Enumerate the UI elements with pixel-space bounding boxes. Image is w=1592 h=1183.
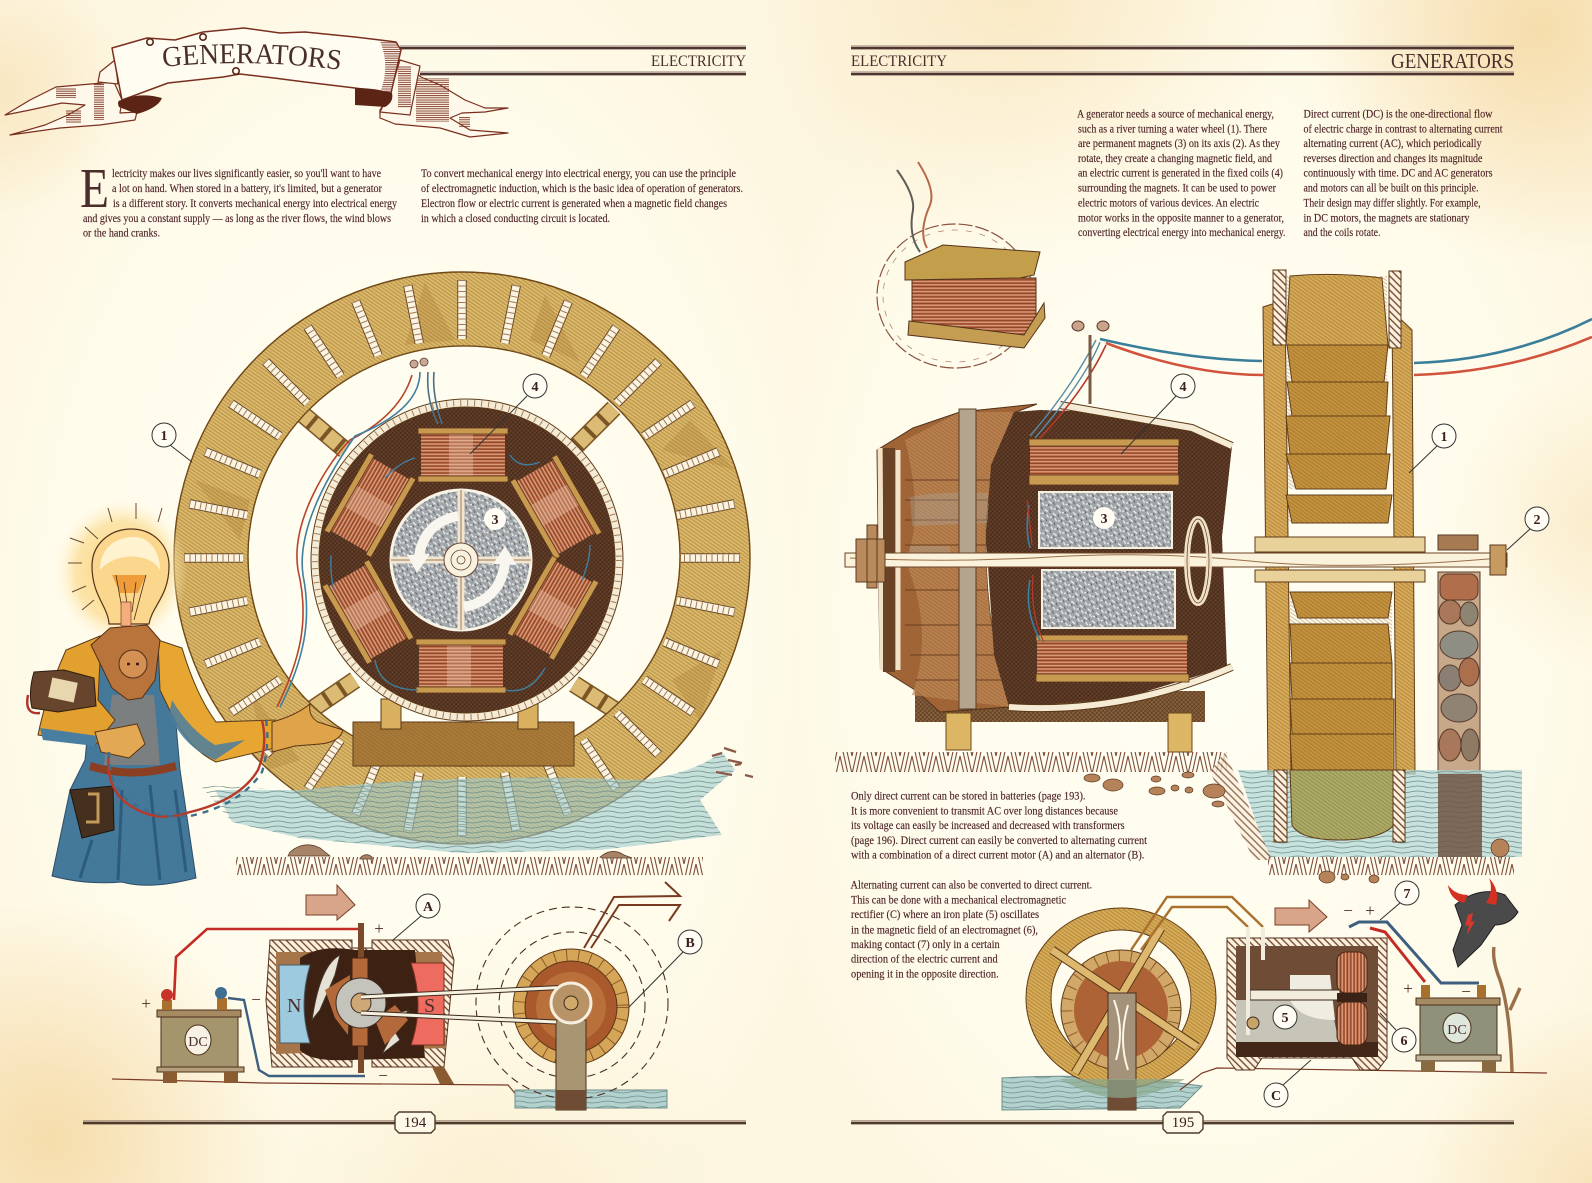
callout C: C xyxy=(1271,1089,1281,1104)
north magnet xyxy=(279,965,310,1043)
motor A casing xyxy=(266,923,454,1084)
banner rear folds xyxy=(98,60,420,115)
coil top plate xyxy=(905,245,1040,280)
wheel ring xyxy=(174,272,750,844)
intro text left page second column: Electron flow or electric current is generated when a magnetic field changes xyxy=(421,196,727,210)
contact arm xyxy=(1250,990,1340,1000)
text block: direct current: Direct current (DC) is the one-directional flow xyxy=(1304,106,1493,120)
intro text left column with drop cap: lectricity makes our lives significantly easier, so you'll want to have xyxy=(112,166,381,180)
wires up to terminals xyxy=(277,358,442,707)
callout 2: 2 xyxy=(1534,513,1540,528)
wheel rim uprights xyxy=(1273,270,1401,348)
battery xyxy=(1416,985,1501,1072)
generator feet xyxy=(946,713,1192,752)
small water wheel xyxy=(1026,908,1216,1110)
callout 7 xyxy=(1380,881,1419,920)
text block: how a generator works xyxy=(1077,106,1286,239)
callout 7: 7 xyxy=(1404,887,1410,902)
ground hatching xyxy=(835,752,1227,772)
helmet collar xyxy=(91,625,160,700)
callout B: B xyxy=(685,936,695,951)
text block: how a generator works: an electric current is generated in the fixed coils (4) xyxy=(1078,166,1283,180)
polarity signs xyxy=(1343,901,1471,1001)
river stones xyxy=(288,845,632,859)
callout 4: 4 xyxy=(1180,380,1186,395)
text block: direct current: and motors can all be built on this principle. xyxy=(1304,180,1478,194)
water splash xyxy=(712,748,753,777)
polarity signs: − xyxy=(1343,901,1353,920)
text block: how a generator works: rotate, they create a changing magnetic field, and xyxy=(1078,151,1272,165)
wheel struts xyxy=(300,408,618,712)
lightbulb-headed character xyxy=(27,500,343,885)
text block: direct current storage: (page 196). Direct current can easily be converted to alternating current xyxy=(851,833,1148,847)
callout 5: 5 xyxy=(1282,1011,1288,1026)
stator coil wires xyxy=(331,455,590,691)
callout 6 xyxy=(1380,1013,1416,1052)
alternator post xyxy=(556,1020,586,1110)
text block: direct current storage: Only direct current can be stored in batteries (page 193). xyxy=(851,788,1086,802)
electromagnet coils xyxy=(1337,952,1367,993)
robe folds xyxy=(80,785,186,880)
text block: how a generator works: are permanent magnets (3) on its axis (2). As they xyxy=(1078,136,1280,150)
banner edge shading xyxy=(380,41,401,93)
intro text left column with drop cap: is a different story. It converts mechanical energy into electrical energy xyxy=(113,196,397,210)
text block: alternating to direct current: opening it in the opposite direction. xyxy=(851,966,999,980)
robe xyxy=(52,655,196,885)
stator coils xyxy=(322,428,602,693)
banner scroll curls xyxy=(147,34,239,74)
detail inset: single coil xyxy=(877,162,1045,368)
grey chest xyxy=(104,695,160,765)
river trench xyxy=(1238,770,1522,857)
holding hand xyxy=(95,724,145,758)
text block: how a generator works: electric motors of various devices. An electric xyxy=(1078,196,1259,210)
rotation arrow xyxy=(464,563,505,607)
intro text left page second column: of electromagnetic induction, which is the basic idea of operation of generators. xyxy=(421,181,743,195)
intro text left page second column xyxy=(421,166,743,225)
outstretched hand xyxy=(272,704,343,752)
text block: direct current storage: with a combination of a direct current motor (A) and an alternator (B). xyxy=(851,848,1144,862)
water under small wheel xyxy=(1002,1076,1202,1110)
text block: direct current storage: its voltage can easily be increased and decreased with transformers xyxy=(851,818,1125,832)
polarity signs: + xyxy=(1365,901,1375,920)
polarity signs: − xyxy=(1461,982,1471,1001)
jacket shoulder and left arm xyxy=(38,636,115,745)
callout A xyxy=(393,894,440,940)
water wheel side: posts xyxy=(1263,300,1415,774)
generator base xyxy=(915,691,1205,722)
text block: direct current storage xyxy=(851,788,1148,862)
stone pillar xyxy=(1438,535,1480,774)
bulb rays xyxy=(68,503,162,610)
ground line xyxy=(1180,1068,1547,1090)
wheel paddles xyxy=(184,280,740,836)
right page header: GENERATORS xyxy=(1391,49,1514,73)
output wires xyxy=(584,882,680,948)
magnets xyxy=(1039,492,1172,548)
wheel shadow wedges xyxy=(195,282,735,770)
battery terminals xyxy=(162,1000,172,1010)
end cap xyxy=(1490,545,1506,575)
illustration: generator side view xyxy=(835,270,1592,883)
title banner xyxy=(4,27,509,138)
wheel buckets xyxy=(1286,274,1394,770)
DC output wires xyxy=(1349,922,1479,983)
insulators xyxy=(1072,321,1109,404)
text block: alternating to direct current: This can be done with a mechanical electromagnetic xyxy=(851,892,1066,906)
text block: direct current: of electric charge in contrast to alternating current xyxy=(1304,121,1503,135)
text block: direct current: alternating current (AC), which periodically xyxy=(1304,136,1482,150)
callout 3 xyxy=(484,508,506,530)
banner title text: GENERATORS xyxy=(163,44,340,70)
text block: alternating to direct current: making contact (7) only in a certain xyxy=(851,937,1000,951)
text block: direct current: and the coils rotate. xyxy=(1304,225,1380,239)
text block: direct current: reverses direction and changes its magnitude xyxy=(1304,151,1482,165)
right page header: ELECTRICITY xyxy=(851,53,947,70)
ring xyxy=(1187,519,1209,603)
banner main band xyxy=(112,28,401,100)
horned hat xyxy=(1448,878,1518,967)
text block: alternating to direct current: direction of the electric current and xyxy=(851,952,998,966)
text block: direct current: continuously with time. DC and AC generators xyxy=(1304,166,1493,180)
motor A casing: S xyxy=(424,995,435,1017)
battery xyxy=(157,987,244,1083)
text block: how a generator works: such as a river turning a water wheel (1). There xyxy=(1078,121,1267,135)
drop cap: E xyxy=(80,158,109,220)
callout 1: 1 xyxy=(160,429,168,444)
page header: left rules and section label: ELECTRICITY xyxy=(651,53,746,70)
callout 4: 4 xyxy=(532,380,538,395)
banner curled ends xyxy=(118,88,392,114)
left frame xyxy=(880,448,898,670)
polarity signs: − xyxy=(378,1066,388,1085)
armature xyxy=(358,923,364,1073)
axle xyxy=(845,519,1507,603)
intro text left column with drop cap: a lot on hand. When stored in a battery, it's limited, but a generator xyxy=(112,181,382,195)
text block: how a generator works: A generator needs a source of mechanical energy, xyxy=(1077,106,1274,120)
text block: alternating to direct current: in the magnetic field of an electromagnet (6), xyxy=(851,922,1038,936)
intro text left page second column: in which a closed conducting circuit is located. xyxy=(421,211,610,225)
text block: how a generator works: motor works in the opposite manner to a generator, xyxy=(1078,210,1284,224)
callout B xyxy=(629,930,702,1007)
polarity signs: + xyxy=(374,919,384,938)
callout 3: 3 xyxy=(1100,512,1108,527)
callout 2 xyxy=(1507,507,1549,550)
wheel cables xyxy=(1030,319,1592,438)
rotor with permanent magnets xyxy=(391,490,531,630)
intro text left column with drop cap xyxy=(80,158,397,240)
drive belt xyxy=(361,987,571,1022)
magnetic field lines xyxy=(476,907,668,1099)
bulb glass xyxy=(92,529,169,624)
text block: how a generator works: converting electrical energy into mechanical energy. xyxy=(1078,225,1286,239)
twig stand xyxy=(1494,947,1520,1072)
direction arrow xyxy=(306,885,355,920)
page header: left rules and section label xyxy=(400,46,746,74)
submerged pillar xyxy=(1438,774,1482,857)
left page footer: 194 xyxy=(404,1115,427,1131)
illustration: water wheel front view xyxy=(152,272,753,875)
inset circle xyxy=(877,224,1033,368)
text block: direct current: in DC motors, the magnets are stationary xyxy=(1304,210,1470,224)
barrel staves xyxy=(877,404,1037,712)
intro text left page second column: To convert mechanical energy into electrical energy, you can use the principle xyxy=(421,166,736,180)
polarity signs: + xyxy=(1403,979,1413,998)
water under alternator xyxy=(515,1090,667,1108)
flange xyxy=(856,525,885,588)
text block: direct current: Their design may differ slightly. For example, xyxy=(1304,196,1480,210)
rectifier box xyxy=(1227,927,1387,1070)
callout A: A xyxy=(423,900,434,915)
stand legs xyxy=(381,699,538,729)
river under the wheel xyxy=(215,752,735,853)
coil wires xyxy=(1027,505,1040,640)
submerged bucket xyxy=(1290,770,1394,840)
wheel spokes xyxy=(1052,928,1197,1073)
rotation arrow xyxy=(419,516,458,556)
pebbles xyxy=(1084,772,1509,883)
stand base xyxy=(353,722,574,766)
twisted cable xyxy=(108,720,264,817)
negative wire xyxy=(228,998,365,1076)
submerged posts xyxy=(1274,770,1405,842)
belt xyxy=(89,762,177,776)
text block: how a generator works: surrounding the magnets. It can be used to power xyxy=(1078,180,1276,194)
ground line xyxy=(112,1079,523,1103)
direction arrow xyxy=(1275,900,1327,932)
bottom coil xyxy=(1036,635,1189,682)
rectifier diagram xyxy=(1002,878,1547,1110)
river bed hatching xyxy=(236,857,703,875)
callout 3: 3 xyxy=(492,513,498,528)
callout C xyxy=(1264,1060,1311,1107)
polarity signs xyxy=(141,919,388,1085)
callout 1 xyxy=(1409,424,1456,473)
callout 4 xyxy=(470,374,547,454)
text block: alternating to direct current xyxy=(850,878,1092,980)
callout 1: 1 xyxy=(1440,430,1448,445)
housing strap xyxy=(1009,405,1232,708)
AC output wires xyxy=(1131,897,1263,950)
intro text left column with drop cap: or the hand cranks. xyxy=(83,226,160,240)
jacket right arm xyxy=(158,640,275,762)
right page header xyxy=(851,46,1514,74)
callout 3 xyxy=(1093,507,1115,529)
hand-held meter xyxy=(30,670,96,712)
left page footer xyxy=(83,1112,746,1133)
stator housing xyxy=(315,403,619,717)
coil lead wires xyxy=(897,170,920,252)
text block: direct current xyxy=(1304,106,1503,239)
barrel hoop xyxy=(959,409,976,709)
wheel submerged tint xyxy=(1060,1079,1185,1098)
callout 6: 6 xyxy=(1400,1034,1408,1049)
battery terminals xyxy=(1421,985,1486,998)
intro text left column with drop cap: and gives you a constant supply — as long as the river flows, the wind blows xyxy=(83,211,391,225)
DC motor and alternator diagram xyxy=(112,882,702,1110)
callout 4 xyxy=(1121,374,1195,454)
callout 5 xyxy=(1273,1005,1297,1029)
bulb glow xyxy=(56,500,188,644)
banner tails xyxy=(5,62,508,137)
positive wire xyxy=(174,929,360,1000)
polarity signs: + xyxy=(141,994,151,1013)
interior xyxy=(986,410,1232,707)
right page footer xyxy=(851,1112,1514,1133)
right page footer: 195 xyxy=(1172,1115,1194,1131)
text block: alternating to direct current: Alternating current can also be converted to direct current. xyxy=(850,878,1092,892)
south magnet xyxy=(411,963,444,1045)
polarity signs: − xyxy=(251,990,261,1009)
text block: alternating to direct current: rectifier (C) where an iron plate (5) oscillates xyxy=(851,907,1039,921)
banner tail hatching xyxy=(56,78,470,128)
motor feet xyxy=(432,1067,454,1084)
top coil xyxy=(1029,439,1179,485)
wheel post xyxy=(1108,993,1136,1110)
alternator B xyxy=(361,882,680,1110)
callout 1 xyxy=(152,423,192,462)
coil bottom plate xyxy=(908,303,1045,348)
coil body xyxy=(912,278,1036,340)
battery: DC xyxy=(1447,1023,1467,1038)
battery: DC xyxy=(188,1035,208,1050)
clamps xyxy=(1255,537,1425,552)
text block: direct current storage: It is more convenient to transmit AC over long distances because xyxy=(851,803,1118,817)
motor A casing: N xyxy=(287,995,301,1017)
tool pouch xyxy=(70,786,114,838)
